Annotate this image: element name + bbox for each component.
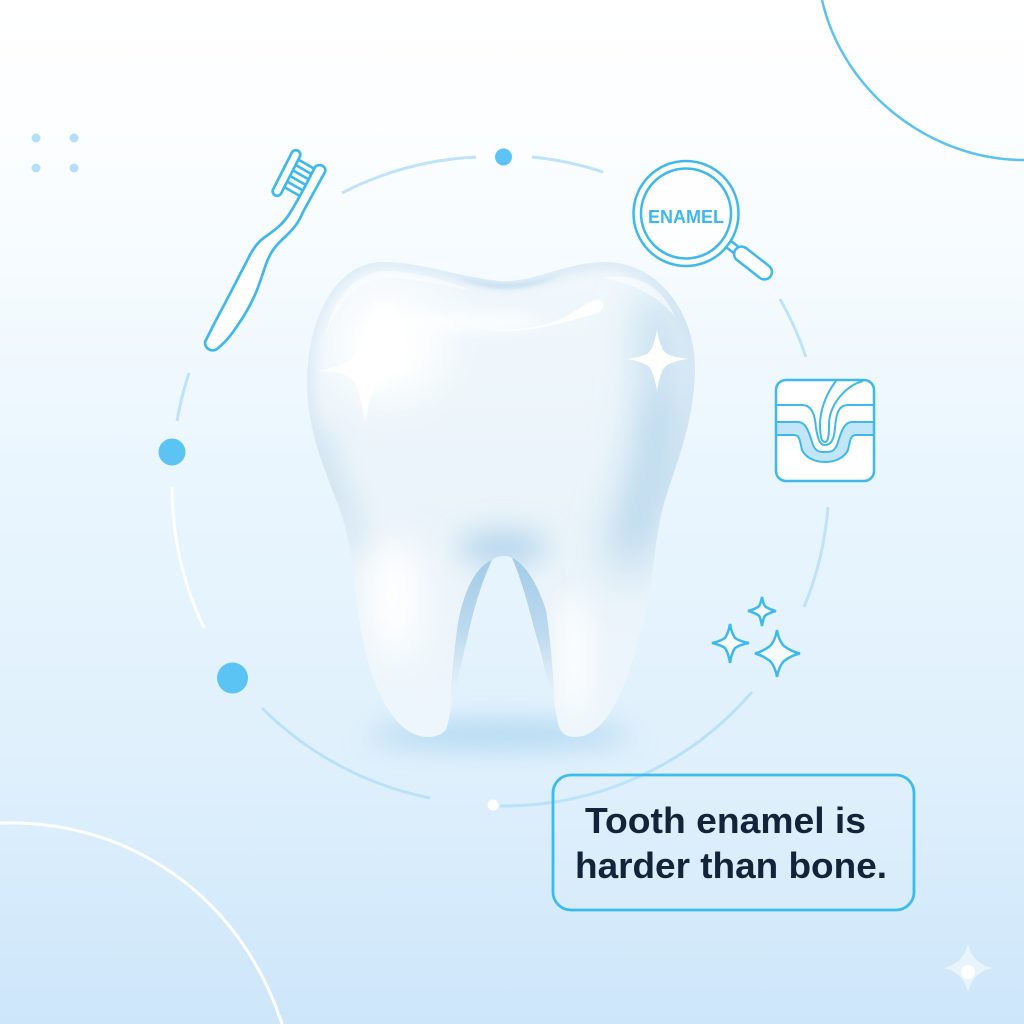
right side shade [625,300,662,570]
top crease [463,277,552,290]
root inner shadow right [512,558,554,702]
tooth illustration [307,262,695,737]
icon: toothbrush [205,149,325,350]
tooth shadow [368,724,632,746]
edge tint [307,262,695,457]
decorative dots top left [32,134,78,172]
sparkle left on tooth [318,344,412,421]
callout text: Tooth enamel is [585,800,866,841]
orbit ring segments [172,157,828,806]
crown rim left [336,271,472,306]
callout text: harder than bone. [575,845,887,886]
crown rim right [603,277,675,317]
orbit dots [158,148,512,810]
corner arc top right [822,0,1024,160]
magnifier label: ENAMEL [648,207,724,227]
enamel layer band [776,422,874,462]
icon: enamel cross-section [776,380,874,481]
magnifier handle [726,241,775,282]
root glow left [372,542,427,654]
root glow right [558,604,592,702]
callout [553,775,914,910]
pit lines [820,381,863,442]
crotch shade [459,532,547,564]
sparkle right on tooth [628,330,687,390]
root inner shadow left [451,560,492,694]
left side shade [318,430,358,555]
crown glow [340,296,440,398]
decorative sparkle bottom right [944,944,992,992]
icon: magnifier [634,161,775,282]
tooth body [307,262,695,737]
icon: sparkles [712,597,800,677]
callout text [575,800,887,886]
tooth shading [307,262,695,720]
corner arc bottom left [0,823,282,1024]
top highlight [450,300,603,331]
